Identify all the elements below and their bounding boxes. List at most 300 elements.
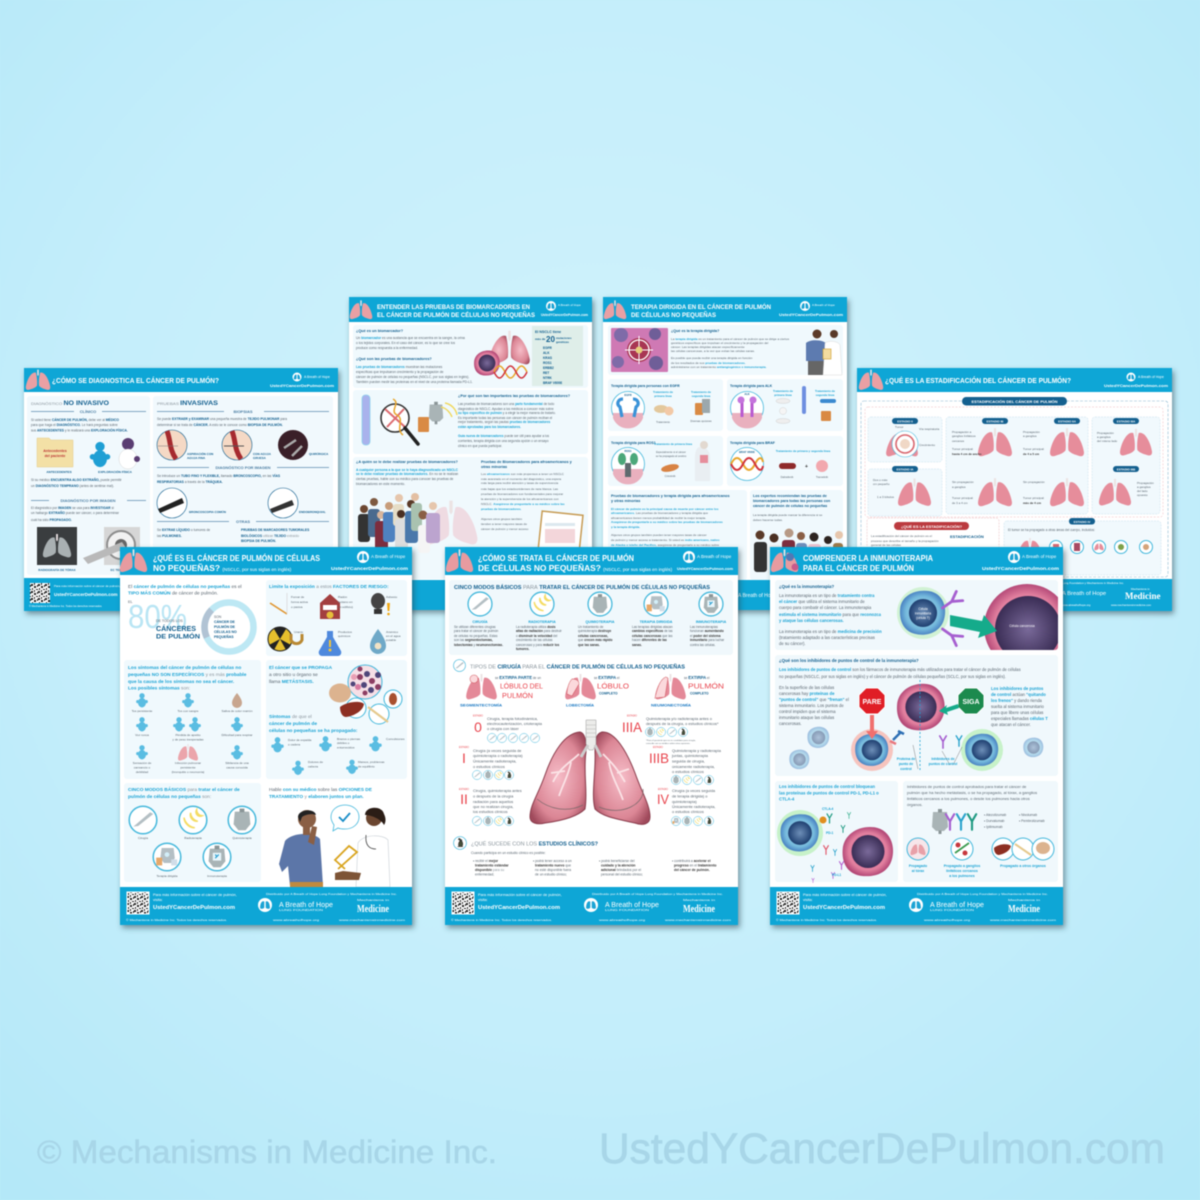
panel: biomarkers in minorities: afroamericanos. Las pruebas de biomarcadores y terapia dirigida que bbox=[611, 511, 708, 515]
panel: checkpoint inhibitors: punto de bbox=[899, 762, 913, 766]
surgery: lobectomy bbox=[565, 674, 630, 708]
icon: patient folder bbox=[37, 438, 73, 467]
panel: approved inhibitors: Propagado a ganglios bbox=[944, 864, 980, 868]
icon: patient folder: del paciente bbox=[45, 454, 65, 458]
panel: approved inhibitors: • Nivolumab bbox=[1019, 813, 1037, 817]
stage 0: ESTADIO bbox=[473, 714, 483, 718]
panel: symptoms: Sibilancia de una bbox=[225, 761, 249, 765]
panel: checkpoint inhibitors: cancerosas hay proteínas de bbox=[779, 691, 835, 696]
panel: who should be tested: A cualquier persona a la que se le haya diagnosticado un NSCLC bbox=[356, 468, 459, 472]
stage I: ESTADIO bbox=[459, 746, 469, 749]
panel: symptoms: (bronquitis o neumonía) bbox=[172, 770, 204, 774]
panel: stage IIIA and IIIB: a ganglios bbox=[1137, 485, 1151, 489]
stage IIIB: IIIB bbox=[649, 750, 669, 766]
panel: symptoms: Voz ronca bbox=[135, 733, 149, 737]
panel: five basic treatments: el poder del sistema bbox=[690, 634, 721, 638]
panel: invasive tests: DIAGNÓSTICO POR IMAGEN bbox=[215, 465, 271, 470]
panel: five basic treatments: son las segmentectomías, bbox=[454, 638, 493, 642]
panel: stage IV bbox=[1004, 518, 1161, 575]
section: clinical trials bbox=[454, 837, 716, 876]
panel: risk factors: o pasiva bbox=[291, 605, 303, 609]
footer: Medicine bbox=[803, 591, 831, 599]
panel: symptoms: Infección pulmonar bbox=[175, 761, 201, 765]
panel: checkpoint inhibitors: los frenos" y dando rienda bbox=[991, 698, 1043, 703]
CT scanner bbox=[83, 527, 140, 565]
footer: A Breath of Hope bbox=[605, 902, 659, 909]
panel: EGFR therapy: Terapia dirigida para personas con EGFR bbox=[611, 384, 680, 388]
panel: five basic treatments: CINCO MODOS BÁSICOS PARA TRATAR EL CÁNCER DE PULMÓN DE CÉLULAS NO PEQUEÑAS bbox=[454, 583, 711, 591]
footer: Mechanisms in bbox=[1008, 898, 1041, 902]
stage II: los estudios clínicos bbox=[473, 809, 508, 814]
illustration: large lungs bbox=[530, 720, 650, 824]
section: clinical trials: tratamiento nuevo que bbox=[535, 864, 571, 868]
panel: stage 0: Tumor bbox=[895, 425, 904, 429]
stage I: I bbox=[462, 750, 466, 766]
surgery: segmentectomy: LÓBULO DEL bbox=[500, 682, 543, 690]
panel: metastasis: Brazos o piernas bbox=[337, 737, 361, 741]
panel: five basic treatments: células cancerosas, bbox=[578, 634, 608, 638]
footer: A Breath of Hope bbox=[279, 902, 333, 909]
panel: five basic treatments: hacen diferentes de las bbox=[632, 638, 667, 642]
panel: EGFR therapy: Tratamiento de bbox=[653, 390, 673, 394]
panel: metastasis: a otro sitio u órgano se bbox=[269, 672, 318, 678]
biomarker list: más de bbox=[535, 337, 546, 341]
panel: metastasis: Dolores de bbox=[308, 760, 323, 764]
header: DE CÉLULAS NO PEQUEÑAS? (NSCLC, por sus siglas en inglés) bbox=[478, 562, 673, 573]
header: NO PEQUEÑAS? (NSCLC, por sus siglas en inglés) bbox=[153, 563, 292, 573]
stage I: Cirugía (a veces seguida de bbox=[473, 748, 521, 753]
footer: Para más información sobre el cáncer de pulmón, visita: bbox=[54, 584, 129, 588]
panel: invasive tests: GRUESA bbox=[253, 456, 267, 460]
surgery: lobectomy: LOBECTOMÍA bbox=[566, 702, 594, 708]
panel: what is staging: ESTADIFICACIÓN bbox=[950, 534, 984, 539]
panel: stage IB and IIA: Tumor principal: bbox=[1023, 447, 1045, 451]
footer: Para más información sobre el cáncer de pulmón, bbox=[478, 893, 562, 897]
biomarker list bbox=[532, 326, 583, 386]
panel: invasive tests: RESPIRATORIAS a través de la TRÁQUEA. bbox=[157, 479, 223, 484]
footer: Mechanisms in bbox=[1131, 587, 1150, 591]
footer: A Breath of Hope bbox=[930, 902, 984, 909]
surgery: pneumonectomy: PULMÓN bbox=[688, 682, 724, 690]
header bbox=[120, 547, 412, 575]
panel: what is immunotherapy: de su cáncer). bbox=[779, 641, 806, 646]
panel: checkpoint inhibitors: puntos de control bbox=[929, 762, 957, 766]
panel: stage IA: Dos o más bbox=[873, 478, 888, 482]
panel: biomarkers in minorities: Asegúrese de preguntarle a su médico sobre las pruebas de biomarcadores bbox=[611, 520, 723, 524]
panel: checkpoint inhibitors: cancerosas. bbox=[779, 721, 802, 726]
panel: EGFR therapy: Diversas opciones bbox=[690, 419, 712, 423]
footer bbox=[857, 579, 1172, 611]
panel: risk factors: Uranio bbox=[294, 630, 303, 634]
panel: ROS1 therapy bbox=[608, 436, 723, 486]
panel: non-invasive diagnosis: DIAGNÓSTICO POR IMAGEN bbox=[60, 498, 116, 503]
header: UstedYCancerDePulmon.com bbox=[331, 566, 409, 572]
panel: checkpoint inhibitors: control impiden que el sistema bbox=[779, 709, 836, 714]
panel: five basic treatments: Un tratamiento de bbox=[578, 625, 604, 629]
panel: BRAF therapy: Tratamiento de primera y segunda línea bbox=[776, 449, 831, 453]
panel: stage IB and IIA: de 4 a 5 cm bbox=[1023, 452, 1040, 456]
panel: biomarkers in minorities: y otras minorías bbox=[611, 499, 640, 503]
stage IV: Cirugía (a veces seguida bbox=[672, 788, 716, 793]
panel: stage IB and IIA: de 3 a 4 cm bbox=[952, 501, 968, 505]
panel: stage 0: ESTADIO 0 bbox=[897, 420, 913, 424]
panel: what is targeted therapy: las células cancerosas, a la vez que evitan las células sanas. bbox=[671, 349, 755, 353]
panel: metastasis: de equilibrio bbox=[358, 764, 375, 768]
panel: non-invasive diagnosis: EC TEP Y RM bbox=[110, 568, 130, 572]
panel: why biomarker tests matter: Guía nueva de biomarcadores puede ser útil para ayudar a los bbox=[458, 434, 549, 438]
panel: ALK therapy: Tratamiento de bbox=[815, 389, 835, 393]
stage I: quimioterapia o radioterapia) bbox=[473, 753, 523, 758]
stage 0: o cirugía con láser bbox=[487, 726, 519, 731]
panel: checkpoint inhibitors: Los inhibidores de puntos de control son los fármacos de inmunoterapia más utilizados para tratar el cáncer de pulmón de células bbox=[779, 667, 1021, 672]
panel: what is targeted therapy: administrarse con un tratamiento antiangiogénico o inmunoterapia. bbox=[671, 365, 767, 369]
panel: EGFR therapy: Tratamiento bbox=[656, 420, 670, 424]
panel: biomarkers in minorities: Pruebas de biomarcadores y terapia dirigida para afroamericanos bbox=[611, 494, 730, 498]
section: clinical trials: • recibir el mejor bbox=[473, 859, 499, 863]
stage II: radiación para aquellos bbox=[473, 799, 513, 804]
footer: UstedYCancerDePulmon.com bbox=[54, 592, 118, 597]
panel: metastasis: células no pequeñas se ha propagado: bbox=[269, 728, 358, 734]
panel: approved inhibitors: Inhibidores de puntos de control aprobados para tratar el cáncer de bbox=[907, 784, 1027, 789]
header: ¿CÓMO SE TRATA EL CÁNCER DE PULMÓN bbox=[478, 552, 634, 563]
panel: five basic treatments: CIRUGÍA bbox=[472, 619, 488, 624]
footer: www.abreathofhope.org bbox=[1062, 603, 1091, 607]
header: ¿QUÉ ES EL CÁNCER DE PULMÓN DE CÉLULAS bbox=[153, 552, 320, 563]
panel: what is a biomarker: ¿Qué es un biomarcador? bbox=[356, 329, 404, 333]
stage IIIA: *Para el paciente que no es candidato para cirugía, bbox=[646, 739, 696, 742]
footer: © Mechanisms in Medicine Inc. Todos los derechos reservados. bbox=[776, 918, 877, 922]
panel: non-invasive diagnosis: El diagnóstico por IMAGEN se usa para INVESTIGAR si bbox=[31, 506, 114, 510]
panel: invasive tests: ENDOBRONQUIAL bbox=[299, 510, 326, 514]
footer: Medicine bbox=[1125, 591, 1160, 601]
panel: what is targeted therapy bbox=[608, 325, 843, 375]
panel: why biomarker tests matter: están aprobadas para los biomarcadores. bbox=[458, 425, 521, 429]
panel: ALK therapy: Terapia dirigida para ALK bbox=[730, 384, 773, 388]
panel: why biomarker tests matter: Las pruebas de biomarcadores son una parte fundamental de todo bbox=[458, 402, 554, 406]
panel: ROS1 therapy: ROS1 bbox=[624, 449, 632, 453]
panel: approved inhibitors bbox=[903, 781, 1058, 882]
panel: stage IV: El tumor se ha propagado a otras áreas del cuerpo, incluidos: bbox=[1008, 528, 1095, 532]
panel: EGFR therapy: segunda línea bbox=[692, 394, 711, 398]
panel: why biomarker tests matter: clínico en que pueda participar. bbox=[458, 444, 502, 448]
text: most common type: TIPO MÁS COMÚN de cáncer de pulmón. bbox=[128, 590, 218, 596]
panel: checkpoint proteins: CTLA-4 bbox=[779, 796, 795, 802]
panel: checkpoint inhibitors: para que libere unas células bbox=[991, 710, 1043, 715]
panel: non-invasive diagnosis bbox=[27, 396, 150, 575]
footer bbox=[445, 887, 738, 925]
panel: ALK therapy: segunda línea bbox=[816, 393, 835, 397]
panel: symptoms: Tos persistente bbox=[132, 709, 153, 713]
footer: © Mechanisms in Medicine Inc. Todos los derechos reservados. bbox=[29, 604, 103, 608]
panel: symptoms: y de peso inesperadas bbox=[172, 738, 204, 742]
footer bbox=[603, 580, 847, 610]
panel: symptoms: debilidad bbox=[136, 770, 148, 774]
icon: chemical flask bbox=[319, 631, 341, 656]
panel: biomarkers in minorities: y la terapia dirigida. bbox=[611, 525, 640, 529]
panel: symptoms: Sensación de bbox=[133, 761, 152, 765]
footer: Medicine bbox=[549, 594, 577, 602]
panel: metastasis: El cáncer que se PROPAGA bbox=[269, 665, 333, 671]
header: UstedYCancerDePulmon.com bbox=[541, 313, 588, 317]
illustration: group of diverse people bbox=[754, 528, 843, 576]
panel: expert recommendation: biomarcadores para todas las personas con bbox=[753, 499, 831, 503]
panel: five basic treatments: lobectomías y neumonectomías. bbox=[454, 643, 503, 647]
panel: why biomarker tests matter: su tipo específico de pulmón y a elegir la mejor manera de tratarlo. bbox=[458, 411, 556, 415]
stage II: o después de la cirugía bbox=[473, 794, 514, 798]
header: DE CÉLULAS NO PEQUEÑAS bbox=[631, 310, 717, 319]
section: clinical trials: del cáncer de pulmón. bbox=[674, 868, 710, 872]
illustration: patient and doctor bbox=[806, 330, 842, 375]
panel: what is a biomarker: Un biomarcador es una sustancia que se encuentra en la sangre, la orina bbox=[356, 336, 465, 340]
footer: LUNG FOUNDATION bbox=[605, 909, 650, 912]
panel: risk factors: Asbesto bbox=[386, 595, 397, 599]
panel: five treatments: Quimioterapia bbox=[232, 836, 252, 840]
panel: who should be tested: más bajas que los estadounidenses de raza blanca. Las bbox=[481, 487, 559, 491]
panel: checkpoint inhibitors: de control actúan "quitando bbox=[991, 692, 1046, 697]
icon: IV bag with antibodies bbox=[932, 809, 976, 834]
stage IIIA: IIIA bbox=[622, 719, 643, 735]
panel: stage IB and IIA: cercanos bbox=[952, 439, 965, 443]
panel: five basic treatments: TERAPIA DIRIGIDA bbox=[640, 620, 673, 624]
illustration: group of people bbox=[358, 493, 477, 553]
panel: EGFR therapy: EGFR bbox=[624, 393, 632, 397]
panel: invasive tests: OTRAS bbox=[236, 519, 250, 524]
illustration: T cell attacking cancer cell: Célula bbox=[918, 607, 928, 611]
biomarker list: mutaciones bbox=[556, 336, 572, 340]
footer: © Mechanisms in Medicine Inc. Todos los derechos reservados. bbox=[126, 918, 227, 922]
panel: invasive tests: CON AGUJA bbox=[253, 452, 272, 456]
panel: BRAF therapy: BRAF V600E bbox=[739, 450, 755, 454]
illustration: patient talking to doctor bbox=[279, 805, 390, 887]
panel: expert recommendation: deben hacerse todas. bbox=[753, 518, 783, 522]
poster: how it is treated bbox=[445, 547, 738, 925]
panel: approved inhibitors: linfáticos cercanos bbox=[946, 869, 978, 873]
panel: ROS1 therapy: Crizotinib bbox=[665, 474, 676, 478]
footer: www.abreathofhope.org bbox=[599, 918, 645, 922]
panel: five basic treatments: para tratar el cáncer de pulmón bbox=[454, 629, 499, 633]
text: talk with your doctor: Hable con su médico sobre las OPCIONES DE bbox=[269, 787, 373, 793]
panel: metastasis: Síntomas de que el bbox=[269, 714, 312, 720]
footer: A Breath of Hope bbox=[738, 593, 776, 599]
panel: invasive tests: determinar si se trata de CÁNCER. A esto se le conoce como BIOPSIA DE PULMÓN. bbox=[157, 422, 283, 427]
bronchoscope icons bbox=[157, 488, 298, 518]
stage IIIB: juntas, quimioterapia bbox=[671, 753, 709, 758]
panel: who should be tested: Algunos otros grupos también bbox=[481, 517, 522, 521]
surgery: segmentectomy: PULMÓN bbox=[502, 691, 533, 700]
panel: stage IIIA and IIIB: del mismo lado bbox=[1097, 439, 1118, 443]
footer: Para más información sobre el cáncer de pulmón, bbox=[153, 893, 237, 897]
footer: Distribuido por A Breath of Hope Lung Foundation y Mechanisms in Medicine Inc. bbox=[1020, 581, 1124, 585]
panel: invasive tests: BIOLÓGICOS utilizan TEJIDO extraído bbox=[241, 533, 299, 538]
panel: approved inhibitors: pulmón que ha hecho metástasis, o se ha propagado, al tórax, a ganglios bbox=[907, 790, 1037, 795]
panel: stage IB and IIA: a ganglios bbox=[952, 485, 966, 489]
section: clinical trials: disponible para su bbox=[475, 868, 504, 872]
panel: stage IIIA and IIIB: del lado bbox=[1137, 489, 1148, 493]
surgery: segmentectomy: se EXTIRPA PARTE de un bbox=[495, 675, 541, 680]
icon: go sign: SIGA bbox=[962, 699, 980, 706]
header bbox=[603, 297, 847, 322]
panel: five treatments: Cirugía bbox=[138, 836, 148, 840]
section: clinical trials: ¿QUÉ SUCEDE CON LOS ESTUDIOS CLÍNICOS? bbox=[471, 840, 598, 848]
panel: stage IIIA and IIIB: Propagación bbox=[1097, 431, 1114, 435]
footer: www.abreathofhope.org bbox=[924, 918, 970, 922]
panel: biomarkers in minorities: de Alaska o isleño del Pacífico, asegúrese de preguntarle a su médico sobre bbox=[611, 543, 719, 547]
QR code bbox=[127, 892, 149, 914]
panel: what is a biomarker: o los tejidos corporales. En el caso del cáncer, es lo que se cree los bbox=[356, 341, 455, 345]
icon: go sign bbox=[939, 688, 984, 715]
stage II: Cirugía, quimioterapia antes bbox=[473, 788, 522, 793]
stage II: ESTADIO bbox=[459, 788, 469, 791]
panel: checkpoint inhibitors bbox=[775, 655, 1058, 776]
panel: five basic treatments: QUIMIOTERAPIA bbox=[586, 620, 615, 624]
panel: risk factors: Radón bbox=[338, 595, 347, 599]
panel: stage IB and IIA: Propagación bbox=[1023, 430, 1040, 434]
stage IIIA: después de la cirugía, o estudios clínicos* bbox=[646, 721, 719, 726]
panel: checkpoint inhibitors: suelta al sistema inmunitario bbox=[991, 704, 1045, 709]
poster: what is non-small cell lung cancer bbox=[120, 547, 412, 925]
panel: what is immunotherapy: La inmunoterapia es un tipo de tratamiento contra bbox=[779, 593, 875, 598]
panel: who should be tested: pruebas de biomarcadores son fundamentales para mejorar bbox=[481, 492, 563, 496]
stage IV bbox=[657, 788, 716, 826]
panel: BRAF therapy: + bbox=[805, 464, 808, 470]
panel: stage IA: ESTADIO IA bbox=[897, 468, 914, 472]
panel: stage IIIA and IIIB: a ganglios bbox=[1097, 435, 1111, 439]
chart: donut 80 percent: SON bbox=[214, 615, 222, 619]
panel: metastasis: Dolor de espalda bbox=[288, 738, 312, 742]
panel: stage IIIA and IIIB bbox=[1092, 417, 1160, 514]
panel: stage IB and IIA: Sin propagación bbox=[1023, 480, 1045, 484]
panel: stage IIIA and IIIB: Propagación bbox=[1137, 481, 1154, 485]
stage II: II bbox=[460, 791, 468, 807]
stage IV: ESTADIO bbox=[658, 788, 668, 791]
footer bbox=[770, 887, 1063, 925]
panel: ALK therapy: Tratamiento de bbox=[773, 389, 793, 393]
watermark: website: UstedYCancerDePulmon.com bbox=[599, 1125, 1165, 1173]
header bbox=[24, 368, 338, 392]
panel: what is staging: general de las células bbox=[871, 543, 901, 547]
panel: five basic treatments: de células no pequeñas. Estas bbox=[454, 634, 498, 638]
panel: BRAF therapy bbox=[727, 436, 843, 486]
header: UstedYCancerDePulmon.com bbox=[982, 566, 1060, 572]
biomarker list: RET bbox=[543, 371, 549, 375]
stage I: Únicamente radioterapia, bbox=[473, 758, 516, 764]
panel: risk factors: en el agua bbox=[386, 634, 401, 638]
panel: stage 0: Crecimiento bbox=[919, 443, 935, 447]
panel: checkpoint inhibitors: Inhibidores de bbox=[931, 757, 955, 761]
header: A Breath of Hope bbox=[1138, 375, 1164, 379]
panel: what is immunotherapy: (tratamiento adaptado a las características precisas bbox=[779, 635, 875, 640]
footer: Mechanisms in bbox=[357, 898, 390, 902]
panel: what is immunotherapy bbox=[775, 580, 1059, 651]
QR code bbox=[777, 892, 799, 914]
panel: invasive tests: BRONCOSCOPIA COMÚN bbox=[189, 509, 226, 514]
header bbox=[349, 297, 592, 322]
panel: non-invasive diagnosis: DIAGNÓSTICO NO INVASIVO bbox=[31, 400, 109, 407]
header: UstedYCancerDePulmon.com bbox=[270, 384, 335, 388]
panel: approved inhibitors: • Durvalumab bbox=[984, 819, 1005, 823]
statistic: 80%: CÁNCERES bbox=[156, 624, 196, 633]
panel: stage IB and IIA: más de 4 cm bbox=[1023, 501, 1041, 505]
pill: staging title bbox=[962, 397, 1067, 406]
biomarker list: BRAF V600E bbox=[543, 381, 562, 385]
biomarker list: EGFR bbox=[543, 346, 553, 350]
panel: metastasis: llama METÁSTASIS. bbox=[269, 678, 314, 685]
text: talk with your doctor bbox=[269, 787, 373, 800]
panel: what is immunotherapy: La inmunoterapia es un tipo de medicina de precisión bbox=[779, 629, 882, 634]
icon: patient folder: Antecedentes bbox=[43, 449, 67, 453]
footer: Distribuido por A Breath of Hope Lung Foundation y Mechanisms in Medicine Inc. bbox=[266, 892, 397, 896]
panel: what is a biomarker: produce como respuesta a la enfermedad. bbox=[356, 346, 418, 350]
panel: approved inhibitors: • Ipilimumab bbox=[984, 825, 1003, 829]
panel: metastasis: débiles o bbox=[337, 741, 350, 745]
panel: five basic treatments: tumores. bbox=[516, 647, 530, 651]
stage IV: de terapia dirigida) o bbox=[672, 794, 707, 798]
header: UstedYCancerDePulmon.com bbox=[1104, 384, 1169, 388]
chest x-ray bbox=[37, 527, 77, 565]
panel: stage IB and IIA: a ganglios bbox=[1023, 434, 1037, 438]
panel: who should be tested: Pruebas de Biomarcadores para afroamericanos y bbox=[481, 460, 573, 464]
panel: five treatments: Terapia dirigida bbox=[157, 874, 178, 878]
illustration: antibodies and cells: CTLA-4 bbox=[822, 807, 834, 811]
header: A Breath of Hope bbox=[371, 554, 406, 559]
panel: five basic treatments: Las terapias dirigidas atacan bbox=[632, 625, 673, 629]
watermark: copyright: © Mechanisms in Medicine Inc. bbox=[37, 1134, 497, 1170]
panel: ROS1 therapy: Tratamiento de primera línea bbox=[654, 442, 692, 446]
stage IV: quimioterapia) bbox=[672, 799, 697, 804]
panel: what is targeted therapy: Es posible que pueda recibir una terapia dirigida en función bbox=[671, 356, 753, 360]
illustration: metastasis organs bbox=[329, 665, 402, 724]
panel: checkpoint proteins: Los inhibidores de puntos de control bloquean bbox=[779, 784, 875, 789]
footer: Para más información sobre el cáncer de pulmón, bbox=[803, 893, 887, 897]
text: most common type: El cáncer de pulmón de células no pequeñas es el bbox=[128, 584, 242, 590]
header: A Breath of Hope bbox=[1022, 554, 1057, 559]
panel: risk factors: forma activa bbox=[291, 600, 308, 604]
footer: www.mechanismsinmedicine.com bbox=[665, 918, 732, 922]
surgery: pneumonectomy: COMPLETO bbox=[690, 692, 709, 696]
panel: approved inhibitors: • Pembrolizumab bbox=[1019, 819, 1045, 823]
panel: risk factors: (sótano en bbox=[338, 600, 353, 604]
stage IIIA: Quimioterapia y/o radioterapia antes o bbox=[646, 716, 712, 721]
panel: ALK therapy bbox=[727, 379, 843, 431]
panel: who should be tested: cáncer de pulmón y menor acceso bbox=[481, 527, 529, 531]
panel: symptoms: persistente bbox=[180, 766, 196, 770]
biomarker list: ERBB2 bbox=[543, 366, 554, 370]
panel: what is a biomarker: También pueden medir las proteínas en el nivel de una proteína llamada PD-L1. bbox=[356, 380, 473, 384]
statistic: 80%: DE PULMÓN bbox=[156, 632, 200, 640]
stage 0: electrocauterización, crioterapia bbox=[487, 721, 543, 726]
stage I: o estudios clínicos bbox=[473, 764, 505, 769]
section: clinical trials: cuidado y la atención bbox=[601, 864, 635, 868]
panel: non-invasive diagnosis: un hallazgo EXTRAÑO puede ser cáncer, o para determinar bbox=[31, 510, 120, 515]
header: A Breath of Hope bbox=[558, 303, 581, 307]
panel: five basic treatments: Las inmunoterapias bbox=[690, 625, 718, 629]
illustration: antibodies and cells: PD-1 bbox=[826, 831, 833, 835]
panel: invasive tests: BIOPSIA DE PULMÓN. bbox=[241, 538, 276, 543]
header bbox=[857, 368, 1172, 392]
panel: who should be tested: ¿A quién se le debe realizar pruebas de biomarcadores? bbox=[356, 460, 458, 464]
panel: five basic treatments: contra las células. bbox=[690, 643, 716, 647]
section: clinical trials: tratamiento estándar bbox=[475, 864, 509, 868]
text: most common type: EL bbox=[128, 600, 133, 604]
biomarker list: El NSCLC tiene bbox=[535, 330, 561, 334]
panel: invasive tests: Se introduce un TUBO FINO Y FLEXIBLE, llamado BRONCOSCOPIO, en las VÍAS bbox=[157, 473, 281, 478]
header: A Breath of Hope bbox=[304, 375, 330, 379]
panel: metastasis: cáncer de pulmón de bbox=[269, 721, 317, 727]
pill: staging title: ESTADIFICACIÓN DEL CÁNCER DE PULMÓN bbox=[971, 399, 1058, 404]
header bbox=[445, 547, 738, 575]
footer: visita: bbox=[153, 898, 163, 902]
panel: why biomarker tests matter: corrientes, terapia dirigida con una segunda opción o un ensayo bbox=[458, 439, 549, 443]
